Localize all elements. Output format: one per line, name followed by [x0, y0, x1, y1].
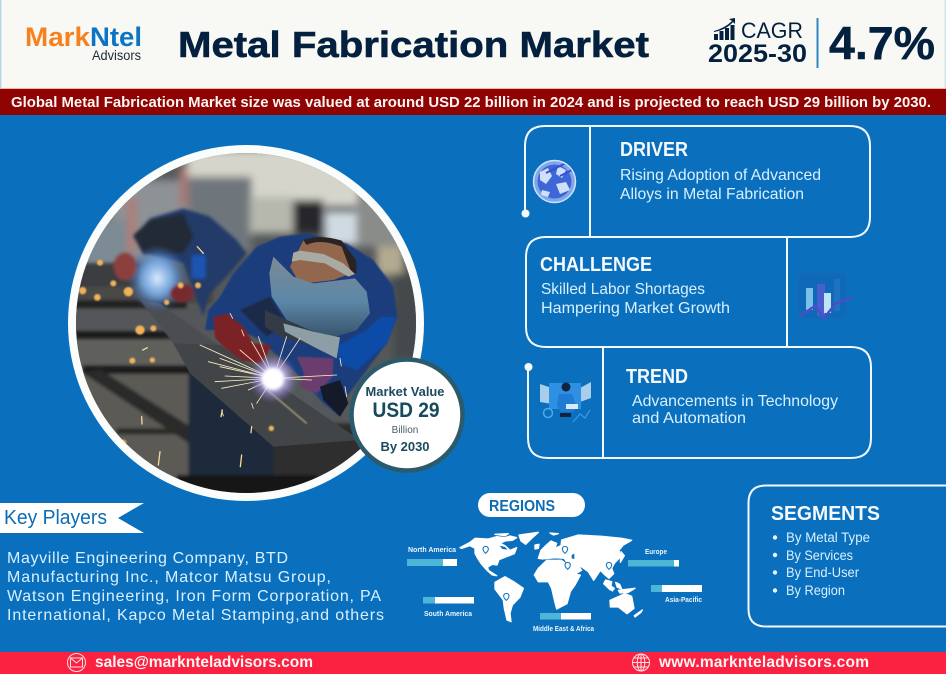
trend text: Advancements in Technology: [632, 393, 838, 410]
right glove: [297, 357, 333, 393]
photo: welders at work: [68, 145, 424, 501]
near steel beam: [173, 343, 360, 447]
badge year: By 2030: [380, 440, 430, 454]
key players banner: Key Players: [4, 507, 107, 529]
region bar: Asia-Pacific: Asia-Pacific: [665, 595, 702, 604]
panel: trend: [524, 347, 871, 458]
driver text: [620, 167, 821, 203]
segments list: By Services: [786, 548, 853, 563]
lower steel beams: [73, 263, 380, 501]
market value badge: [352, 360, 462, 470]
challenge text: Hampering Market Growth: [541, 300, 730, 317]
jacket: [205, 233, 397, 417]
logo: MarkNtel Advisors: Advisors: [92, 47, 141, 63]
icon: growth bars and arrow: [714, 18, 735, 40]
summary band: [0, 89, 946, 115]
rear welder: [114, 208, 247, 317]
driver text: Alloys in Metal Fabrication: [620, 186, 804, 203]
region bar: North America: North America: [408, 545, 457, 554]
panel: segments: [748, 486, 946, 626]
stray sparks: [142, 247, 252, 467]
header band: [0, 0, 946, 89]
segments list: By End-User: [786, 565, 859, 580]
trend text: [632, 393, 838, 427]
region bar: Asia-Pacific: [651, 585, 702, 604]
icon: globe: [533, 160, 576, 203]
key players list: Mayville Engineering Company, BTD: [7, 550, 288, 567]
region bar: Europe: Europe: [645, 547, 667, 556]
CAGR period: 2025-30: [708, 40, 807, 68]
region bar: North America: [407, 545, 457, 566]
blurred workshop background: [80, 150, 423, 360]
badge label: Market Value: [366, 384, 444, 399]
icon: globe: [632, 654, 650, 671]
CAGR label: CAGR: [741, 18, 803, 43]
logo: MarkNtel Advisors: [25, 22, 142, 63]
regions pill: REGIONS: [489, 498, 555, 515]
front welder, drawn in local coordinates: [173, 233, 397, 447]
badge unit: Billion: [392, 425, 418, 436]
segments list: By Region: [786, 583, 845, 598]
icon: chart: [799, 273, 852, 318]
regions pill: [478, 493, 585, 517]
sparks streaks: [200, 313, 347, 416]
segments list: [773, 530, 870, 598]
trend text: and Automation: [632, 410, 746, 427]
segments heading: SEGMENTS: [771, 503, 880, 525]
head: [290, 240, 350, 283]
region bar: Europe: [628, 547, 679, 566]
challenge text: Skilled Labor Shortages: [541, 281, 705, 298]
world map: [460, 532, 642, 622]
region bar: Middle East and Africa: [533, 613, 595, 633]
icon: person with dashboards: [540, 382, 591, 422]
title: Metal Fabrication Market: [178, 24, 649, 65]
icon: envelope: [68, 654, 86, 672]
key players list: Watson Engineering, Iron Form Corporation, PA: [7, 588, 381, 605]
key players list: [7, 550, 384, 624]
left glove: [213, 313, 272, 363]
badge value: USD 29: [372, 399, 440, 422]
logo: MarkNtel Advisors: Mark: [25, 22, 91, 52]
key players banner: [0, 503, 144, 533]
driver heading: DRIVER: [620, 139, 688, 161]
CAGR block: [708, 17, 935, 69]
key players list: International, Kapco Metal Stamping,and others: [7, 607, 384, 624]
challenge text: [541, 281, 730, 317]
footer bar: [0, 652, 946, 674]
segments list: By Metal Type: [786, 530, 870, 545]
key players list: Manufacturing Inc., Matcor Matsu Group,: [7, 569, 331, 586]
driver text: Rising Adoption of Advanced: [620, 167, 821, 184]
summary band: Global Metal Fabrication Market size was valued at around USD 22 billion in 2024 and is projected to reach USD 29 billion by 2030.: [11, 94, 931, 111]
region bar: Middle East and Africa: Middle East & Africa: [533, 624, 595, 633]
panel: challenge: [526, 237, 852, 347]
website: www.marknteladvisors.com: [658, 654, 869, 671]
panel: driver: [522, 126, 870, 237]
challenge heading: CHALLENGE: [540, 254, 652, 276]
CAGR value: 4.7%: [829, 17, 935, 69]
region bar: South America: [423, 597, 474, 618]
map inland water and pins: [483, 546, 612, 600]
logo: MarkNtel Advisors: Ntel: [90, 22, 142, 52]
region bar: South America: South America: [424, 609, 473, 618]
far steel beam: [140, 300, 216, 345]
helmet: [269, 257, 370, 337]
trend heading: TREND: [626, 366, 688, 388]
email: sales@marknteladvisors.com: [95, 654, 313, 671]
